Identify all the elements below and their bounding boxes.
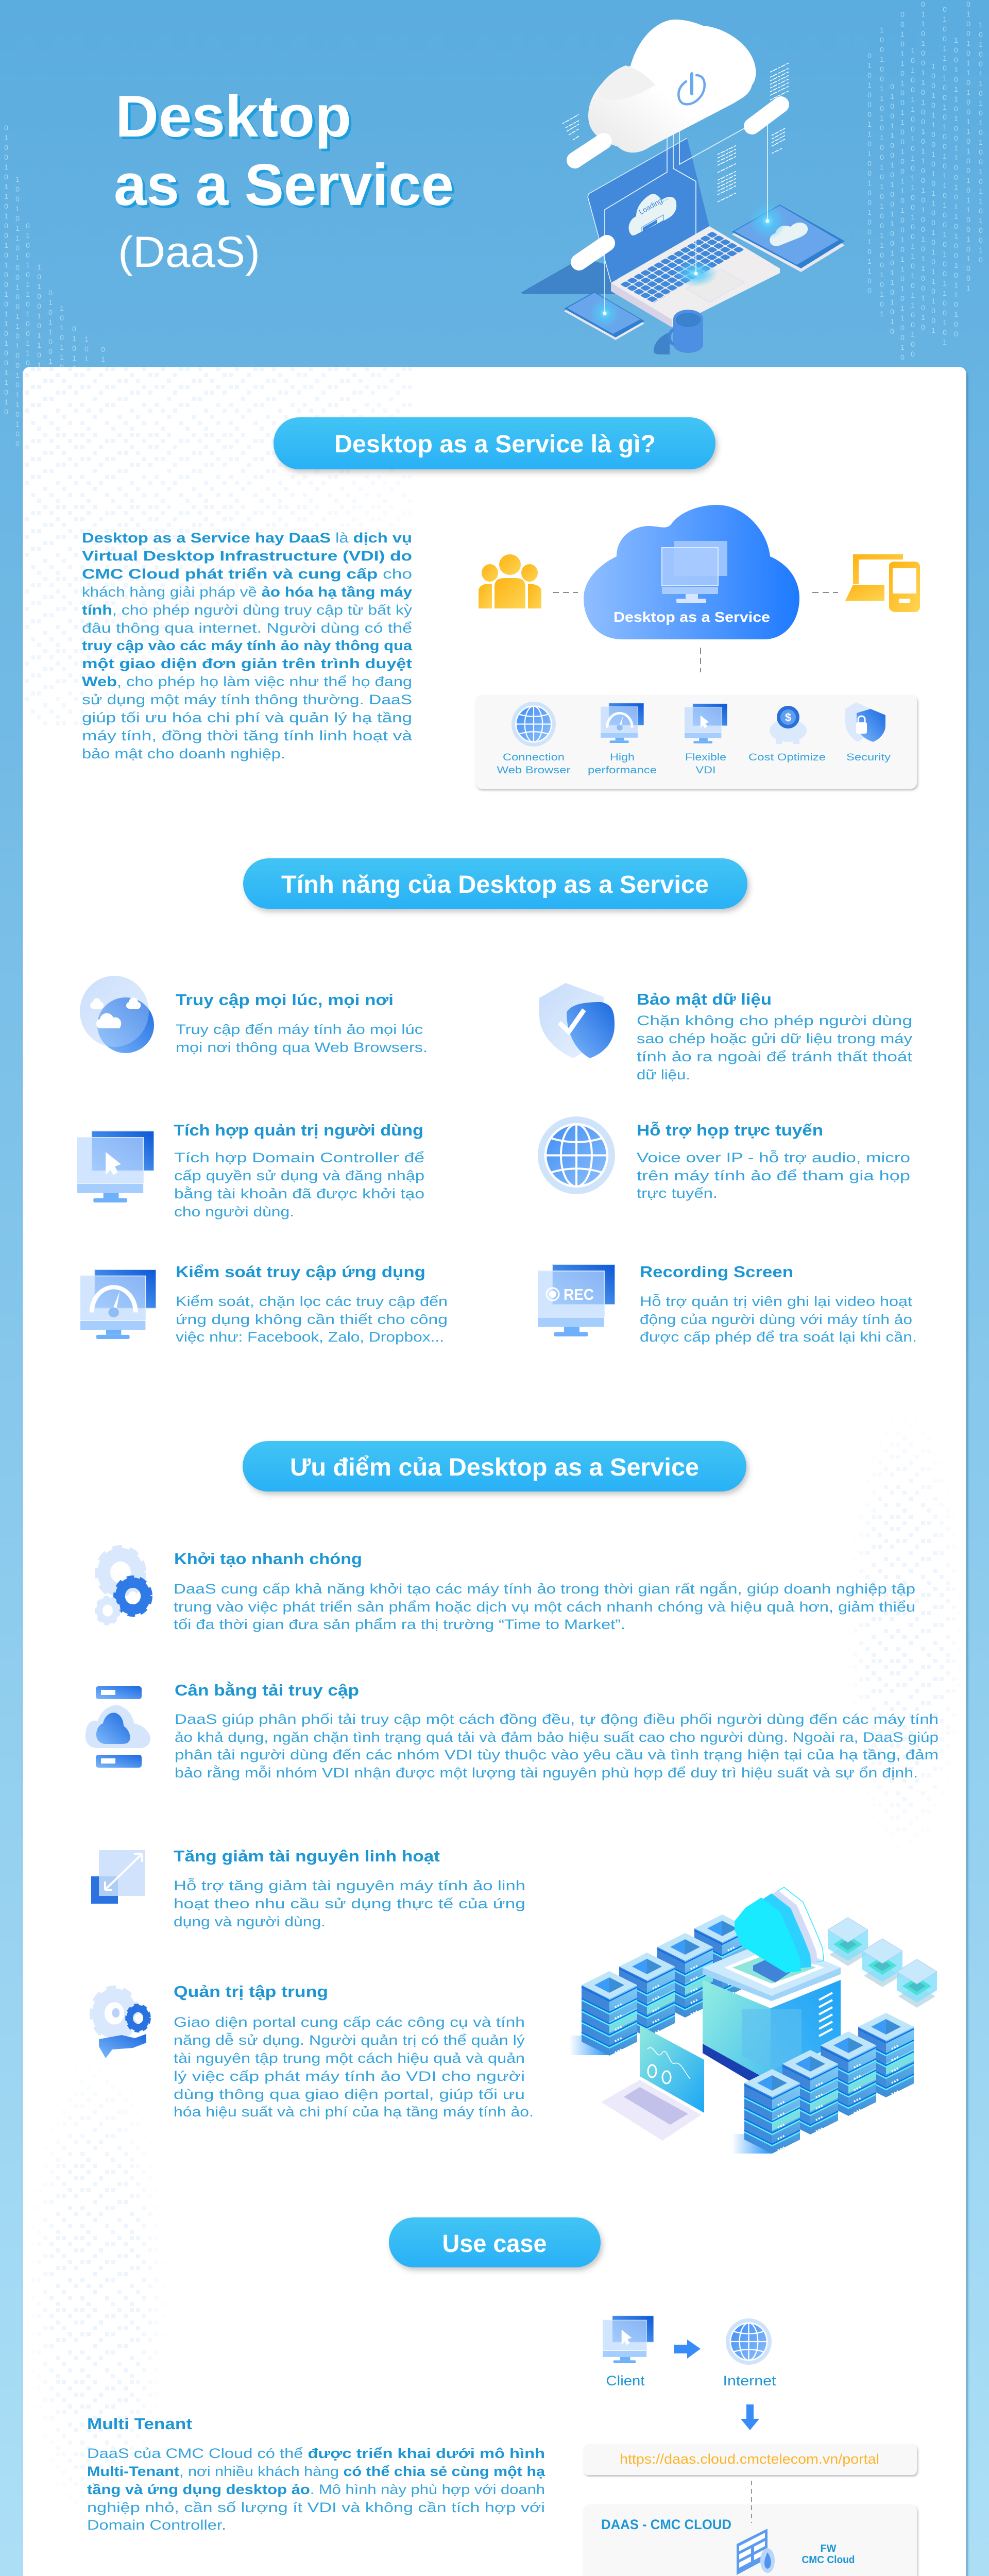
cyan cloud bbox=[735, 1887, 824, 1973]
portal url box bbox=[584, 2444, 917, 2475]
section 1 description text: Web , cho phép họ làm việc như thể họ đang bbox=[82, 674, 412, 689]
feature labels: High bbox=[610, 752, 635, 763]
laptop with chart bbox=[601, 2025, 704, 2141]
icon: Security bbox=[845, 702, 885, 742]
icon: firewall bbox=[737, 2529, 775, 2575]
feature: Truy cập mọi lúc, mọi nơi: Truy cập mọi lúc, mọi nơi bbox=[176, 991, 394, 1009]
laptop screen bbox=[588, 138, 709, 282]
icon: Connection Web Browser bbox=[511, 702, 556, 747]
front row server towers bbox=[732, 2013, 914, 2154]
binary rain: left: 01001011010011010101 bbox=[24, 222, 32, 417]
connector dashes around cloud bbox=[553, 592, 838, 672]
dashed links bbox=[705, 2481, 811, 2576]
DaaS CMC Cloud box: FW bbox=[820, 2543, 837, 2554]
advantage: Khởi tạo nhanh chóng: Khởi tạo nhanh chóng bbox=[174, 1550, 362, 1568]
use case: Multi Tenant text: Domain Controller. bbox=[87, 2517, 226, 2533]
advantage: Quản trị tập trung: Giao diện portal cung cấp các công cụ và tính bbox=[174, 2014, 525, 2030]
icon: globe bbox=[538, 1116, 615, 1194]
binary rain: left: 0101100101 bbox=[46, 289, 55, 386]
advantage: Quản trị tập trung: Quản trị tập trung bbox=[174, 1982, 328, 2001]
phone bbox=[564, 292, 644, 340]
icon: cloud globe bbox=[80, 976, 154, 1053]
binary rain: left: 1001011010010011010010110100 bbox=[13, 175, 22, 449]
section 1 description text: tính , cho phép người dùng truy cập từ bất kỳ bbox=[82, 602, 413, 618]
advantage: Tăng giảm tài nguyên linh hoạt bbox=[91, 1847, 525, 1929]
section 1 description text bbox=[82, 530, 413, 761]
advantage: Khởi tạo nhanh chóng: trung vào việc phát triển sản phẩm hoặc dịch vụ một cách nhanh chóng và hiệu quả hơn, giảm thiểu bbox=[174, 1599, 915, 1615]
main cloud bbox=[588, 20, 756, 152]
hero title bbox=[114, 84, 456, 276]
binary rain: left bbox=[2, 124, 107, 449]
feature labels: performance bbox=[588, 765, 657, 776]
feature labels: VDI bbox=[695, 765, 716, 776]
advantage: Tăng giảm tài nguyên linh hoạt: hoạt theo nhu cầu sử dụng thực tế của ứng bbox=[174, 1896, 525, 1911]
advantage: Quản trị tập trung: tài nguyên tập trung một cách hiệu quả và quản bbox=[174, 2050, 525, 2066]
keyboard bbox=[619, 231, 745, 303]
use case: Multi Tenant text bbox=[87, 2415, 545, 2533]
icon: gears bbox=[97, 1549, 149, 1623]
power icon bbox=[678, 74, 705, 104]
feature: Kiểm soát truy cập ứng dụng: việc như: Facebook, Zalo, Dropbox... bbox=[176, 1329, 444, 1345]
feature: Bảo mật dữ liệu: sao chép hoặc gửi dữ liệu trong máy bbox=[637, 1031, 913, 1046]
binary rain: left: 01 bbox=[99, 345, 107, 365]
feature: Hỗ trợ họp trực tuyến: trực tuyến. bbox=[637, 1185, 718, 1201]
DaaS CMC Cloud box bbox=[584, 2481, 917, 2576]
small cubes bbox=[828, 1918, 937, 2008]
flow labels: Client bbox=[606, 2373, 645, 2388]
binary rain: left: 01011 bbox=[70, 325, 78, 374]
illustration: data center servers bbox=[569, 1887, 937, 2154]
advantage: Tăng giảm tài nguyên linh hoạt: Hỗ trợ tăng giảm tài nguyên máy tính ảo linh bbox=[174, 1877, 525, 1893]
feature labels: Web Browser bbox=[497, 765, 571, 776]
feature: Truy cập mọi lúc, mọi nơi bbox=[80, 976, 428, 1055]
binary rain: left: 101001011010010 bbox=[35, 263, 43, 410]
feature: Kiểm soát truy cập ứng dụng bbox=[80, 1263, 448, 1345]
loading cloud bbox=[629, 193, 676, 235]
device glows bbox=[589, 202, 786, 329]
section 1 description text: máy tính, đồng thời tăng tính linh hoạt và bbox=[82, 728, 413, 743]
feature: Truy cập mọi lúc, mọi nơi: mọi nơi thông qua Web Browsers. bbox=[176, 1040, 428, 1055]
feature: Tích hợp quản trị người dùng: cấp quyền sử dụng và đăng nhập bbox=[174, 1168, 424, 1183]
mug bbox=[654, 310, 703, 354]
feature: Hỗ trợ họp trực tuyến: Hỗ trợ họp trực tuyến bbox=[637, 1121, 823, 1139]
advantage: Cân bằng tải truy cập: Cân bằng tải truy cập bbox=[175, 1681, 359, 1699]
binary rain: left: 10101101 bbox=[58, 304, 66, 382]
binary rain: top right: 01001100101001100101101010 bbox=[888, 82, 896, 337]
capsules bbox=[575, 105, 781, 262]
connection lines bbox=[605, 124, 768, 313]
icon: resize arrows bbox=[91, 1850, 145, 1904]
binary rain: top right: 01001101001010010110100101001100101 bbox=[941, 5, 949, 348]
DaaS CMC Cloud box: DAAS - CMC CLOUD bbox=[601, 2517, 731, 2532]
advantage: Quản trị tập trung: dùng thông qua giao diện portal, giúp tối ưu bbox=[174, 2087, 525, 2102]
icon: High performance bbox=[601, 703, 644, 743]
binary rain: top right: 10100110010101100100110101100100 bbox=[909, 46, 917, 360]
feature labels: Flexible bbox=[685, 752, 726, 763]
back row server towers bbox=[582, 1914, 750, 2056]
hero illustration: cloud and devices bbox=[521, 20, 845, 354]
binary rain: top right bbox=[865, 0, 985, 363]
advantage: Quản trị tập trung: lý việc cấp phát máy tính ảo VDI cho người bbox=[174, 2069, 525, 2084]
section 1 description text: một giao diện đơn giản trên trình duyệt bbox=[82, 656, 412, 671]
hero title: as a Service bbox=[114, 152, 454, 218]
feature: Tích hợp quản trị người dùng: Tích hợp quản trị người dùng bbox=[174, 1121, 423, 1139]
icon: managed gear bbox=[93, 1990, 149, 2058]
section 1 description text: truy cập vào các máy tính ảo này thông qua bbox=[82, 638, 413, 653]
section 1 description text: khách hàng giải pháp về ảo hóa hạ tầng máy bbox=[82, 584, 412, 600]
section 1 description text: Desktop as a Service hay DaaS là dịch vụ bbox=[82, 530, 412, 546]
icon: Flexible VDI bbox=[685, 704, 727, 743]
feature: Kiểm soát truy cập ứng dụng: Kiểm soát truy cập ứng dụng bbox=[176, 1263, 425, 1281]
section 4 heading pill bbox=[389, 2217, 601, 2267]
cloud: Desktop as a Service bbox=[584, 505, 799, 639]
feature labels: Connection bbox=[503, 752, 565, 763]
advantage: Cân bằng tải truy cập: phân tải người dùng đến các nhóm VDI tùy thuộc vào yêu cầu và tình trạng hiện tại của hạ tầng, đảm bbox=[175, 1747, 939, 1762]
binary rain: left: 101 bbox=[82, 335, 91, 364]
floor glow bbox=[569, 2036, 609, 2055]
section 1 description text: CMC Cloud phát triển và cung cấp cho bbox=[82, 566, 412, 582]
icon: Cost Optimize: $ bbox=[785, 711, 791, 724]
section 1 heading pill: Desktop as a Service là gì? bbox=[334, 431, 656, 458]
flow labels: Internet bbox=[723, 2373, 776, 2388]
feature: Recording Screen: được cấp phép để tra soát lại khi cần. bbox=[640, 1329, 917, 1345]
section 1 description text: Virtual Desktop Infrastructure (VDI) do bbox=[82, 548, 412, 564]
icon: shield check bbox=[539, 983, 615, 1058]
portal url box: https://daas.cloud.cmctelecom.vn/portal bbox=[620, 2451, 879, 2467]
use case: Multi Tenant text: tầng và ứng dụng desktop ảo . Mô hình này phù hợp với doanh bbox=[87, 2482, 545, 2497]
advantage: Quản trị tập trung: hóa hiệu suất và chi phí của hạ tầng máy tính ảo. bbox=[174, 2104, 534, 2120]
DaaS CMC Cloud box: CMC Cloud bbox=[802, 2554, 855, 2566]
binary rain: top right: 1001011001010110010101101001 bbox=[929, 62, 937, 336]
arrow down bbox=[741, 2404, 759, 2430]
section 1 description text: giúp tối ưu hóa chi phí và quản lý hạ tầng bbox=[82, 710, 412, 725]
icon: monitor gauge bbox=[80, 1269, 156, 1339]
icon: devices bbox=[845, 554, 920, 612]
section 1 description text: sử dụng một máy tính thông thường. DaaS bbox=[82, 692, 412, 707]
use case: Multi Tenant text: nghiệp nhỏ, cần số lượng ít VDI và không cần tích hợp với bbox=[87, 2500, 545, 2515]
binary rain: top right: 1010011010101001011010010 bbox=[977, 21, 985, 265]
advantage: Cân bằng tải truy cập: bảo rằng mỗi nhóm VDI nhận được một lượng tài nguyên phù hợp để duy trì hiệu suất và sự ổn định. bbox=[175, 1765, 918, 1781]
binary rain: top right: 1001011010011001011010010110100 bbox=[952, 36, 960, 340]
binary rain: top right: 010010110100110100101100101001 bbox=[964, 0, 973, 294]
Multi Tenant diagram bbox=[584, 2316, 917, 2576]
advantage: Tăng giảm tài nguyên linh hoạt: Tăng giảm tài nguyên linh hoạt bbox=[174, 1847, 440, 1865]
icon: monitor REC: REC bbox=[564, 1285, 594, 1303]
feature: Hỗ trợ họp trực tuyến: trên máy tính ảo để tham gia họp bbox=[637, 1168, 910, 1183]
feature: Kiểm soát truy cập ứng dụng: ứng dụng không cần thiết cho công bbox=[176, 1312, 448, 1327]
trackpad bbox=[686, 269, 744, 302]
icon: Cost Optimize bbox=[770, 706, 807, 744]
feature: Bảo mật dữ liệu: Bảo mật dữ liệu bbox=[637, 990, 772, 1008]
tablet bbox=[732, 205, 845, 272]
feature: Kiểm soát truy cập ứng dụng: Kiểm soát, chặn lọc các truy cập đến bbox=[176, 1294, 448, 1309]
binary rain: left: 010010110100101001011010011010 bbox=[2, 124, 10, 417]
icon: load balancer cloud bbox=[86, 1686, 150, 1768]
advantage: Cân bằng tải truy cập: DaaS giúp phân phối tải truy cập một cách đồng đều, tự động điều phối người dùng đến các máy tính bbox=[175, 1711, 939, 1727]
title line: Desktop: Desktop bbox=[118, 87, 354, 152]
binary rain: top right: 100100110101001010100110010101 bbox=[878, 26, 886, 319]
feature labels bbox=[497, 752, 891, 776]
icon: monitor REC bbox=[538, 1264, 615, 1336]
use case: Multi Tenant text: Multi Tenant bbox=[87, 2415, 192, 2433]
feature: Bảo mật dữ liệu bbox=[539, 983, 913, 1082]
section 1 heading pill bbox=[274, 417, 715, 469]
feature: Recording Screen: động của người dùng với máy tính ảo bbox=[640, 1312, 912, 1327]
section 1 description text: đâu thông qua internet. Người dùng có thể bbox=[82, 620, 412, 636]
feature: Recording Screen bbox=[538, 1263, 917, 1345]
advantage: Khởi tạo nhanh chóng bbox=[97, 1549, 915, 1632]
icon: internet bbox=[726, 2318, 772, 2365]
binary rain: top right: 001011010011001001101001011010110010 bbox=[898, 10, 907, 363]
feature: Truy cập mọi lúc, mọi nơi: Truy cập đến máy tính ảo mọi lúc bbox=[176, 1022, 423, 1037]
cloud: Desktop as a Service: Desktop as a Service bbox=[613, 609, 770, 625]
feature: Hỗ trợ họp trực tuyến: Voice over IP - hỗ trợ audio, micro bbox=[637, 1149, 910, 1165]
loading cloud: Loading... bbox=[638, 193, 669, 216]
section 4 heading pill: Use case bbox=[442, 2230, 547, 2258]
advantage: Tăng giảm tài nguyên linh hoạt: dụng và người dùng. bbox=[174, 1914, 326, 1929]
feature: Bảo mật dữ liệu: Chặn không cho phép người dùng bbox=[637, 1013, 912, 1028]
use case: Multi Tenant text: DaaS của CMC Cloud có thể được triển khai dưới mô hình bbox=[87, 2446, 545, 2461]
arrow right bbox=[674, 2340, 701, 2359]
feature: Recording Screen: Recording Screen bbox=[640, 1263, 793, 1281]
feature labels: Security bbox=[846, 752, 891, 763]
feature: Tích hợp quản trị người dùng: cho người dùng. bbox=[174, 1204, 294, 1219]
advantage: Cân bằng tải truy cập bbox=[86, 1681, 939, 1781]
hero title: (DaaS) bbox=[118, 228, 260, 276]
advantage: Khởi tạo nhanh chóng: DaaS cung cấp khả năng khởi tạo các máy tính ảo trong thời gian rất ngắn, giúp doanh nghiệp tập bbox=[174, 1581, 915, 1597]
laptop shadow bbox=[521, 258, 618, 294]
feature: Hỗ trợ họp trực tuyến bbox=[538, 1116, 910, 1201]
section 2 heading pill: Tính năng của Desktop as a Service bbox=[281, 871, 709, 899]
panel: feature icons bbox=[475, 695, 917, 789]
icon: client bbox=[603, 2316, 654, 2363]
feature labels: Cost Optimize bbox=[748, 752, 826, 763]
flow labels bbox=[606, 2373, 776, 2388]
section 1 description text: bảo mật cho doanh nghiệp. bbox=[82, 746, 285, 761]
hero title: as a Service bbox=[116, 155, 456, 221]
central tower bbox=[703, 1939, 841, 2086]
section 2 heading pill bbox=[243, 858, 747, 909]
binary rain: top right: 0101000110100100100101100 bbox=[865, 52, 874, 296]
hero title: Desktop bbox=[115, 84, 351, 149]
feature: Recording Screen: Hỗ trợ quản trị viên ghi lại video hoạt bbox=[640, 1293, 913, 1309]
icon: monitor cursor bbox=[77, 1131, 154, 1202]
section 3 heading pill: Ưu điểm của Desktop as a Service bbox=[290, 1454, 699, 1481]
section 3 heading pill bbox=[243, 1441, 746, 1492]
binary rain: top right: 0110100110100101100101001011001010 bbox=[919, 0, 927, 333]
icon: users group bbox=[479, 554, 541, 608]
use case: Multi Tenant text: Multi-Tenant , nơi nhiều khách hàng có thể chia sẻ cùng một hạ bbox=[87, 2464, 545, 2479]
feature: Tích hợp quản trị người dùng: Tích hợp Domain Controller để bbox=[174, 1150, 424, 1165]
advantage: Cân bằng tải truy cập: ảo khả dụng, ngăn chặn tình trạng quá tải và đảm bảo hiệu suất cao cho người dùng. Ngoài ra, DaaS giúp bbox=[175, 1730, 939, 1745]
feature: Bảo mật dữ liệu: dữ liệu. bbox=[637, 1067, 690, 1082]
feature: Bảo mật dữ liệu: tính ảo ra ngoài để tránh thất thoát bbox=[637, 1049, 913, 1064]
feature: Tích hợp quản trị người dùng: bằng tài khoản đã được khởi tạo bbox=[174, 1185, 424, 1201]
data text dashes bbox=[562, 63, 789, 202]
advantage: Quản trị tập trung: năng dễ sử dụng. Người quản trị có thể quản lý bbox=[174, 2032, 525, 2048]
laptop base bbox=[611, 226, 780, 327]
advantage: Quản trị tập trung bbox=[93, 1982, 534, 2120]
advantage: Khởi tạo nhanh chóng: tối đa thời gian đưa sản phẩm ra thị trường “Time to Market”. bbox=[174, 1617, 625, 1632]
feature: Tích hợp quản trị người dùng bbox=[77, 1121, 424, 1219]
